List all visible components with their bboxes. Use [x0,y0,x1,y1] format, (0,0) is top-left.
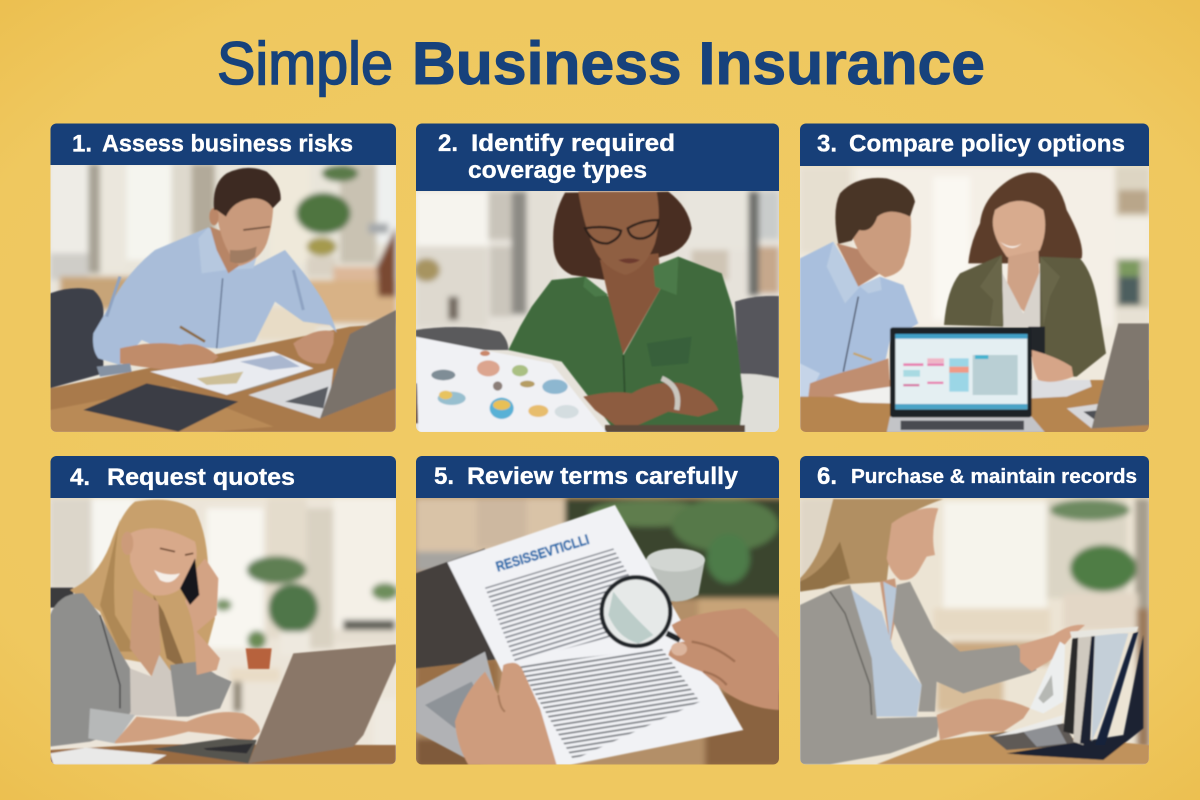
icon: magnifying glass [602,577,680,646]
photo: woman on phone at laptop [40,495,407,768]
man's shirt [800,242,918,397]
panel: step 2 identify required coverage types [405,124,785,437]
header bar [416,124,779,191]
header text: Identify required [471,130,675,157]
panel: step 6 purchase and maintain records [790,456,1157,768]
right hand [668,608,779,710]
header text: Review terms carefully [467,463,739,490]
hair [70,500,215,675]
icon: laptop [248,368,333,418]
header text: Compare policy options [849,130,1125,158]
woman's blouse [1002,272,1041,328]
tablet [83,383,238,432]
top blouse [128,655,177,717]
header text: 4. [70,464,90,491]
header bar [800,456,1149,498]
upper hand [1020,625,1085,672]
man's hair [835,178,915,244]
paper [993,715,1063,737]
face [578,192,659,275]
pot [246,648,272,669]
laptop behind document [416,548,505,668]
header text: 6. [817,463,837,490]
table [50,323,396,432]
panel: step 3 compare policy options [790,124,1157,437]
photo: hands holding policy and magnifying glass [405,495,785,768]
document heading: RESISSEVTICLLI [494,531,591,575]
header text: Request quotes [107,464,295,491]
woman's hair [968,172,1082,263]
panel: step 1 assess business risks [40,124,407,437]
man's forearm and hand [808,358,890,399]
table [800,380,1150,433]
woman's neck [1007,250,1040,317]
table [50,744,396,764]
jacket [50,593,232,747]
header text: 1. [72,130,92,158]
header bar [800,124,1149,166]
face and neck [210,226,240,274]
header text: Purchase & maintain records [851,465,1137,488]
header text: 3. [817,130,837,158]
icon: binder [1007,635,1143,760]
header text: 5. [434,463,454,490]
photo: man and woman comparing on laptop [790,163,1157,437]
photo: man reviewing documents at desk [40,160,407,437]
icon: phone [180,558,199,605]
shirt [93,227,337,365]
lower hand and arm [937,699,1030,740]
header bar [50,124,396,165]
neck [880,578,898,645]
document with chart blobs [416,337,607,432]
jacket [800,582,1037,764]
photo: woman filing records in binder [790,495,1157,768]
icon: laptop [152,738,257,763]
table edge [605,425,745,432]
laptop screen content [895,334,1027,409]
document lower text lines [518,648,700,760]
arms and hands [120,343,218,372]
chair back [50,588,73,608]
hair [214,168,281,217]
header bar [416,456,779,498]
shirt [508,257,743,427]
icon: glasses [585,220,658,243]
arm holding phone [185,558,220,675]
icon: centre laptop [887,417,1045,432]
icon: bracelet [662,378,678,410]
panel: step 4 request quotes [40,456,407,768]
left hand [455,663,557,765]
chairs [416,327,508,350]
keyboard [988,723,1077,750]
forearm and hand [115,712,260,743]
face [887,508,938,580]
header text: coverage types [468,157,647,184]
table [877,732,1149,764]
woman's hand and notebook [1032,380,1092,398]
icon: office chair [50,288,104,388]
woman's jacket [944,255,1106,377]
papers [50,748,167,764]
icon: cup [647,552,705,602]
header text [73,134,352,152]
header text: 2. [438,130,458,157]
forearm and hand [583,383,718,425]
panel: step 5 review terms carefully [405,456,785,768]
hair [553,192,692,280]
title: Simple [217,30,393,97]
photo: woman with glasses reading chart document [405,187,785,437]
woman's face [993,201,1045,260]
header text: Assess business risks [102,130,353,158]
face [130,528,197,595]
icon: right laptop [1067,403,1102,428]
neck [600,253,662,357]
man's neck and face [837,243,880,287]
header text [438,130,675,184]
document text lines [485,548,658,662]
hair [800,499,943,592]
title: Business Insurance [412,30,985,97]
notebook [150,352,313,395]
document [447,505,743,765]
blouse [850,582,922,717]
header bar [50,456,396,498]
neck [130,588,161,677]
